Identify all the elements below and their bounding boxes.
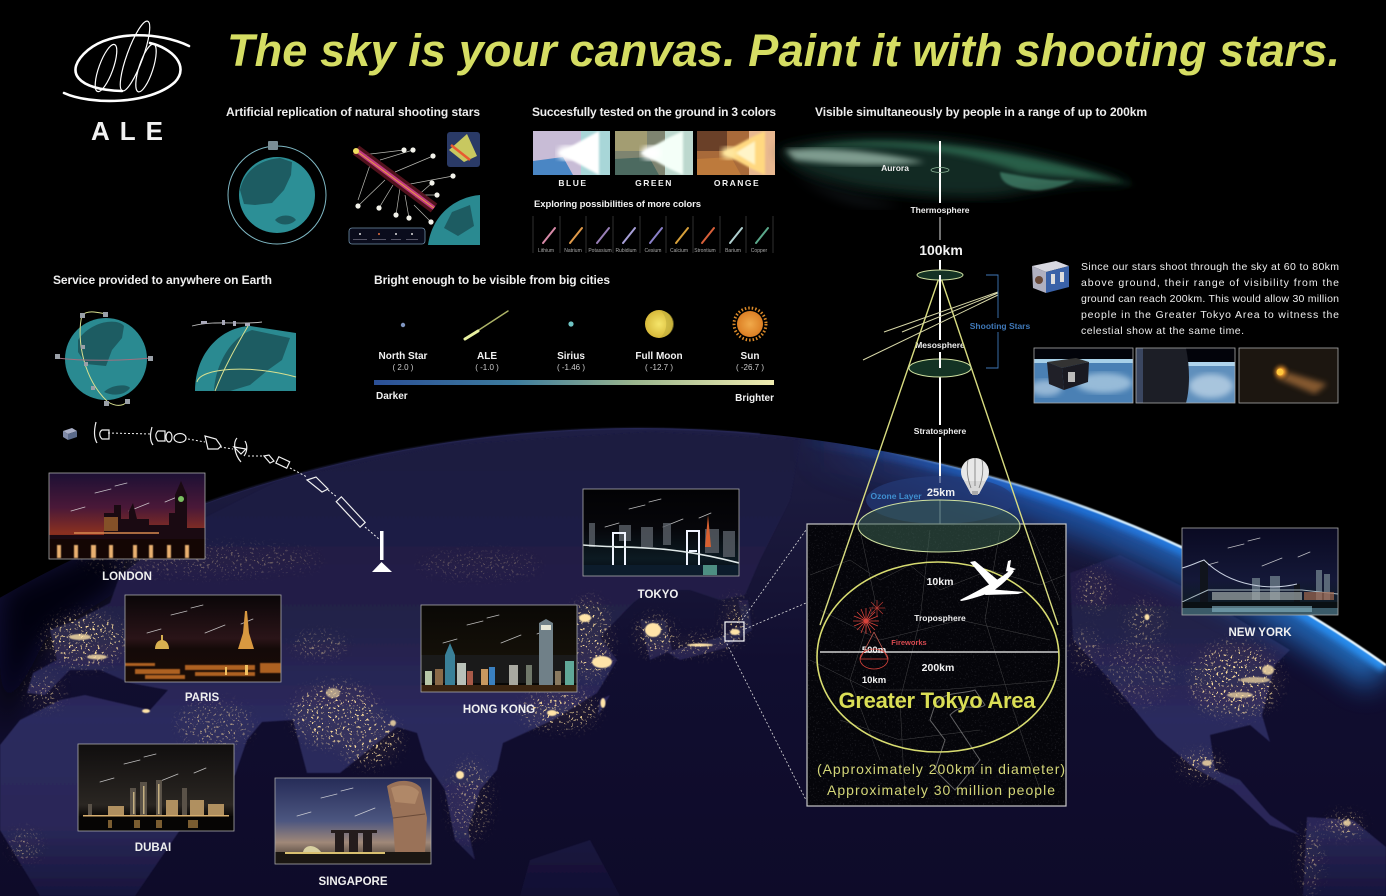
photo: Dubai: [78, 744, 234, 831]
icon: orbit globe: [228, 141, 326, 244]
brightness chart: Brighter: [735, 393, 774, 404]
icon: partial globe with orbit tracks: [192, 320, 296, 391]
element color streaks: Strontium: [694, 248, 716, 254]
callout lines from Japan: [725, 530, 806, 800]
photo: Hong Kong: [421, 605, 577, 692]
element color streaks: Copper: [751, 248, 768, 254]
brightness chart: ( -26.7 ): [736, 363, 764, 372]
icon: rocket on pad: [372, 531, 392, 572]
altitude labels: 200km: [922, 662, 954, 674]
brightness chart: ALE: [477, 351, 497, 362]
text block: visibility explanation: [1081, 261, 1339, 337]
element color streaks: Rubidium: [615, 248, 637, 254]
panel text: Greater Tokyo: (Approximately 200km in diameter): [817, 761, 1065, 777]
photo: London: [49, 473, 205, 559]
heading: visible range: Visible simultaneously by people in a range of up to 200km: [815, 105, 1147, 119]
aurora: [778, 137, 1135, 206]
shooting stars: [863, 275, 1030, 368]
color labels: ORANGE: [714, 178, 760, 188]
photo: green test: [615, 131, 693, 175]
label: Tokyo: TOKYO: [638, 589, 678, 601]
ozone layer: 25km: [927, 487, 955, 499]
photo: New York: [1182, 528, 1338, 615]
brightness chart: ( -12.7 ): [645, 363, 673, 372]
color labels: [558, 178, 760, 188]
photo: satellite over earth: [1030, 348, 1133, 403]
element color streaks: [533, 216, 773, 254]
label: Singapore: SINGAPORE: [318, 876, 388, 888]
color labels: GREEN: [635, 178, 673, 188]
element color streaks: Potassium: [588, 248, 612, 254]
atmosphere column: 100km: [919, 242, 963, 258]
logo: ALE: [64, 18, 189, 146]
heading: more colors: Exploring possibilities of more colors: [534, 199, 701, 210]
icon: satellite cube: [1032, 261, 1069, 293]
icon: airplane: [960, 560, 1024, 601]
photo: blue test: [533, 131, 610, 175]
brightness chart: ( -1.46 ): [557, 363, 585, 372]
element color streaks: Calcium: [670, 248, 688, 254]
heading: service: Service provided to anywhere on Earth: [53, 273, 272, 287]
label: London: LONDON: [102, 571, 152, 583]
text block: visibility explanation: ground can reach 200km. This would allow 30 million: [1081, 293, 1339, 305]
altitude labels: 500m: [862, 645, 886, 656]
heading: brightness: Bright enough to be visible from big cities: [374, 273, 610, 287]
color labels: BLUE: [558, 178, 588, 188]
panel text: Greater Tokyo: [817, 688, 1065, 798]
atmosphere column: Stratosphere: [914, 426, 966, 436]
altitude labels: 10km: [927, 576, 953, 588]
brightness chart: ( 2.0 ): [393, 363, 414, 372]
fireworks: Fireworks: [891, 638, 927, 647]
altitude labels: Troposphere: [914, 613, 966, 623]
photo: satellite close-up: [1136, 348, 1235, 403]
label: New York: NEW YORK: [1228, 627, 1292, 639]
ozone layer: [866, 476, 1014, 524]
label: Paris: PARIS: [185, 692, 219, 704]
brightness chart: ( -1.0 ): [475, 363, 499, 372]
photo: Paris: [125, 595, 281, 682]
element color streaks: Lithium: [538, 248, 554, 254]
text block: visibility explanation: celestial show at the same time.: [1081, 325, 1244, 337]
ozone layer: Ozone Layer: [870, 491, 922, 501]
fireworks: [853, 600, 927, 669]
visibility cone: [817, 270, 1059, 752]
shooting stars: Shooting Stars: [970, 321, 1030, 331]
diagram: shooting star release: [349, 132, 480, 245]
panel: Greater Tokyo map: [807, 524, 1066, 806]
atmosphere column: Thermosphere: [910, 205, 970, 215]
photo: Singapore: [275, 778, 431, 864]
heading: artificial replication: Artificial replication of natural shooting stars: [226, 105, 480, 119]
atmosphere column: [881, 141, 970, 652]
label: Hong Kong: HONG KONG: [463, 704, 535, 716]
atmosphere column: Mesosphere: [915, 340, 965, 350]
brightness chart: Darker: [376, 391, 408, 402]
icon: balloon: [961, 458, 989, 495]
brightness chart: Sirius: [557, 351, 585, 362]
panel text: Greater Tokyo: Approximately 30 million people: [827, 782, 1055, 798]
launch trajectory with rocket stages: [95, 422, 380, 540]
text block: visibility explanation: above ground, their range of visibility from the: [1081, 277, 1339, 289]
atmosphere column: Aurora: [881, 163, 909, 173]
text block: visibility explanation: people in the Greater Tokyo Area to witness the: [1081, 309, 1339, 321]
photo: orange test: [697, 131, 775, 175]
icon: small satellite: [63, 428, 77, 440]
title: The sky is your canvas. Paint it with shooting stars.: [227, 25, 1340, 76]
altitude labels: [862, 576, 966, 686]
brightness chart: [374, 308, 774, 404]
earth at night: [0, 420, 1386, 896]
panel text: Greater Tokyo: Greater Tokyo Area: [838, 688, 1036, 713]
photo: Tokyo: [583, 489, 739, 576]
element color streaks: Cesium: [645, 248, 661, 254]
heading: ground test: Succesfully tested on the ground in 3 colors: [532, 105, 776, 119]
label: Dubai: DUBAI: [135, 842, 171, 854]
element color streaks: Natrium: [564, 248, 582, 254]
altitude labels: 10km: [862, 675, 886, 686]
element color streaks: Barium: [725, 248, 741, 254]
logo: ALE: ALE: [91, 116, 163, 146]
icon: globe with satellite orbits: [55, 312, 153, 406]
brightness chart: Full Moon: [635, 351, 683, 362]
brightness chart: North Star: [379, 351, 428, 362]
brightness chart: Sun: [741, 351, 759, 362]
text block: visibility explanation: Since our stars shoot through the sky at 60 to 80km: [1081, 261, 1339, 273]
photo: test comet: [1239, 348, 1338, 403]
